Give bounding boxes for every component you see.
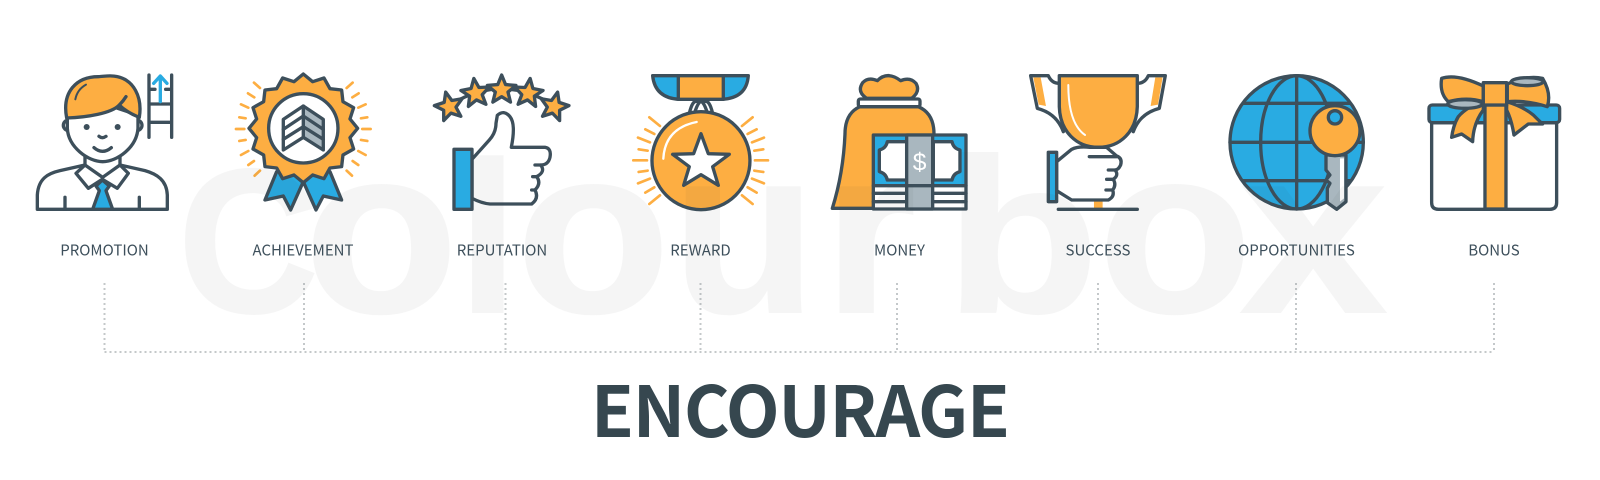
watermark: r [824, 99, 916, 363]
icon: money bag with banknotes [832, 76, 966, 209]
item: opportunities [1230, 76, 1363, 260]
label: money: MONEY [874, 240, 925, 260]
dollar sign: $ [913, 149, 927, 176]
item: money [832, 76, 966, 260]
item: reputation [432, 75, 571, 260]
title: ENCOURAGE [591, 357, 1010, 458]
icon: hand holding trophy [1031, 76, 1165, 209]
icon: thumbs up with five stars [432, 75, 571, 209]
dotted connector lines [104, 283, 1494, 352]
icon: gift box with bow [1429, 77, 1560, 209]
icon: star medal [633, 76, 768, 210]
label: reward: REWARD [670, 240, 731, 260]
icon: man with ladder [37, 75, 172, 209]
watermark: b [945, 114, 1099, 359]
item: promotion [37, 75, 172, 260]
label: bonus: BONUS [1468, 240, 1520, 260]
icon: globe with key [1230, 76, 1363, 209]
icon: rosette badge [236, 74, 371, 210]
item: achievement [236, 74, 371, 260]
item: bonus [1429, 77, 1560, 260]
watermark: C [178, 127, 319, 356]
item: reward [633, 76, 768, 260]
item: success [1031, 76, 1165, 260]
label: achievement: ACHIEVEMENT [253, 240, 354, 260]
label: success: SUCCESS [1066, 240, 1131, 260]
watermark: o [304, 99, 458, 362]
watermark: l [458, 117, 518, 358]
watermark [178, 99, 1387, 363]
label: opportunities: OPPORTUNITIES [1238, 240, 1355, 260]
label: promotion: PROMOTION [60, 240, 149, 260]
watermark: u [672, 99, 816, 363]
watermark: o [516, 99, 670, 362]
watermark: o [1098, 99, 1252, 362]
label: reputation: REPUTATION [457, 240, 547, 260]
watermark: x [1240, 99, 1387, 363]
